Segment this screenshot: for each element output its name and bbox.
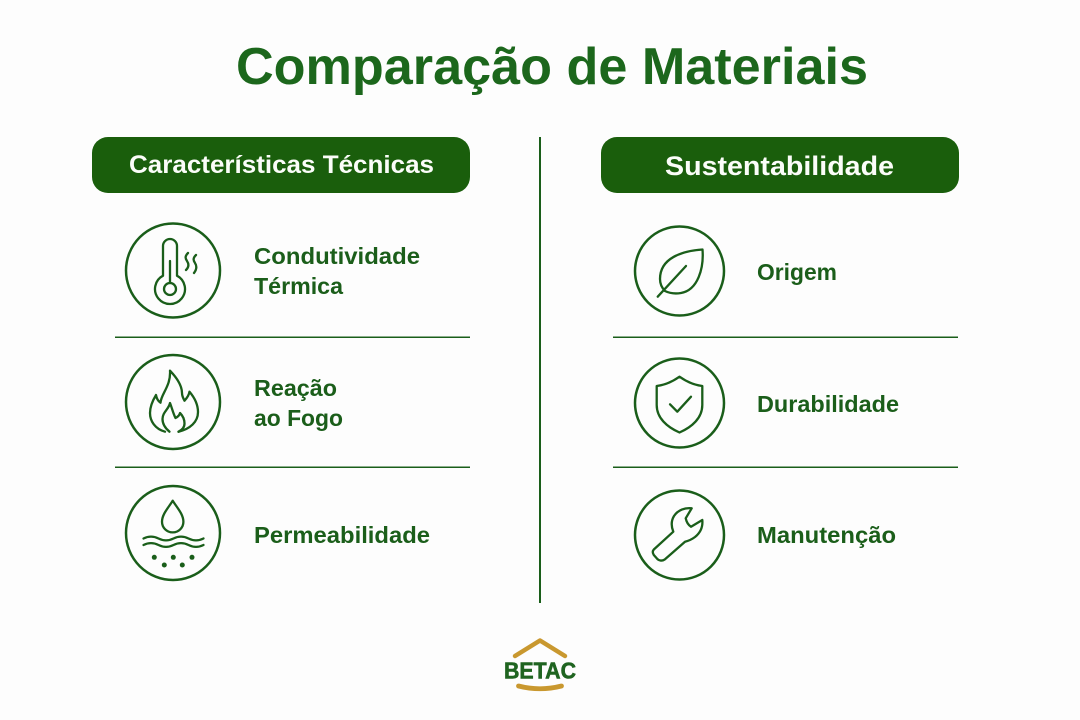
icon: flame — [126, 355, 220, 449]
logo: BETAC — [504, 640, 576, 689]
label: manutenção: Manutenção — [757, 522, 896, 548]
icon: shield with check — [635, 358, 724, 448]
icon: leaf — [635, 226, 724, 316]
heading pill: sustentabilidade: Sustentabilidade — [665, 151, 894, 181]
label: reação ao fogo — [254, 375, 343, 431]
label: condutividade térmica: Térmica — [254, 273, 343, 299]
label: reação ao fogo: Reação — [254, 375, 337, 401]
icon: thermometer — [126, 224, 220, 318]
label: reação ao fogo: ao Fogo — [254, 405, 343, 431]
title: Comparação de Materiais — [236, 38, 868, 96]
heading pill: sustentabilidade — [601, 137, 959, 193]
center divider — [539, 137, 541, 603]
panel: sustentabilidade — [601, 137, 959, 580]
heading pill: características técnicas: Características Técnicas — [129, 151, 434, 179]
logo: BETAC: BETAC — [504, 658, 576, 684]
icon: water drop over permeable layer — [126, 486, 220, 580]
label: condutividade térmica: Condutividade — [254, 243, 420, 269]
heading pill: características técnicas — [92, 137, 470, 193]
icon: wrench — [635, 490, 724, 580]
label: permeabilidade: Permeabilidade — [254, 522, 430, 548]
panel: características técnicas — [92, 137, 470, 580]
label: durabilidade: Durabilidade — [757, 391, 899, 417]
label: condutividade térmica — [254, 243, 420, 299]
label: origem: Origem — [757, 259, 837, 285]
